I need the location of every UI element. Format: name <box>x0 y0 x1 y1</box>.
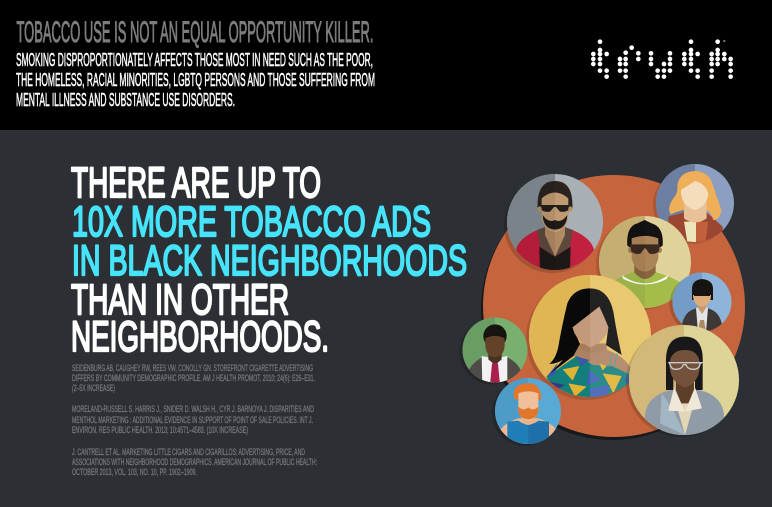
text: SMOKING DISPROPORTIONATELY AFFECTS THOSE MOST IN NEED SUCH AS THE POOR, <box>16 50 373 70</box>
references: ENVIRON. RES PUBLIC HEALTH. 2013; 10:4571–4583. (10X INCREASE) <box>72 425 248 435</box>
avatar: woman with black bob and dark jacket <box>670 272 732 334</box>
references: SEIDENBURG AB, CAUGHEY RW, REES VW, CONOLLY GN. STOREFRONT CIGARETTE ADVERTISING <box>72 363 313 373</box>
references: J. CANTRELL ET AL. MARKETING LITTLE CIGARS AND CIGARILLOS: ADVERTISING, PRICE, AND <box>72 447 305 457</box>
avatar: man with tie on green background <box>460 317 528 387</box>
truth logo <box>591 39 733 79</box>
avatar: blonde woman <box>653 163 734 245</box>
headline: THAN IN OTHER <box>71 276 289 324</box>
references: ASSOCIATIONS WITH NEIGHBORHOOD DEMOGRAPHICS. AMERICAN JOURNAL OF PUBLIC HEALTH: <box>72 457 317 467</box>
header band <box>0 0 772 130</box>
references: DIFFERS BY COMMUNITY DEMOGRAPHIC PROFILE. AM J HEALTH PROMOT. 2010; 24(6): E26–E31. <box>72 373 315 383</box>
references: MENTHOL MARKETING : ADDITIONAL EVIDENCE IN SUPPORT OF POINT OF SALE POLICIES. INT J. <box>72 415 313 425</box>
avatar: man with sunglasses and red jacket <box>504 173 603 275</box>
avatar: central woman with patterned top <box>526 275 651 402</box>
avatar: man with sunglasses and green shirt <box>596 216 691 312</box>
references: OCTOBER 2013, VOL. 103, NO. 10, PP. 1902–1909. <box>72 467 197 477</box>
headline: NEIGHBORHOODS. <box>71 313 329 361</box>
references <box>72 363 317 477</box>
headline <box>71 159 467 361</box>
header description: MENTAL ILLNESS AND SUBSTANCE USE DISORDERS. <box>16 90 235 110</box>
headline: THERE ARE UP TO <box>71 159 321 207</box>
text: THE HOMELESS, RACIAL MINORITIES, LGBTQ PERSONS AND THOSE SUFFERING FROM <box>16 70 375 90</box>
headline: 10X MORE TOBACCO ADS <box>72 198 431 246</box>
avatar: man with orange hair and beard <box>492 378 561 447</box>
header description <box>16 50 375 110</box>
headline: IN BLACK NEIGHBORHOODS <box>72 237 467 285</box>
large orange circle <box>481 175 745 440</box>
avatar: woman with glasses and grey jacket <box>626 325 739 440</box>
references: MORELAND-RUSSELL S. HARRIS J., SNIDER D. WALSH H., CYR J. BARNOYA J. DISPARITIES AND <box>72 404 314 414</box>
references: (2–5X INCREASE) <box>72 383 115 393</box>
